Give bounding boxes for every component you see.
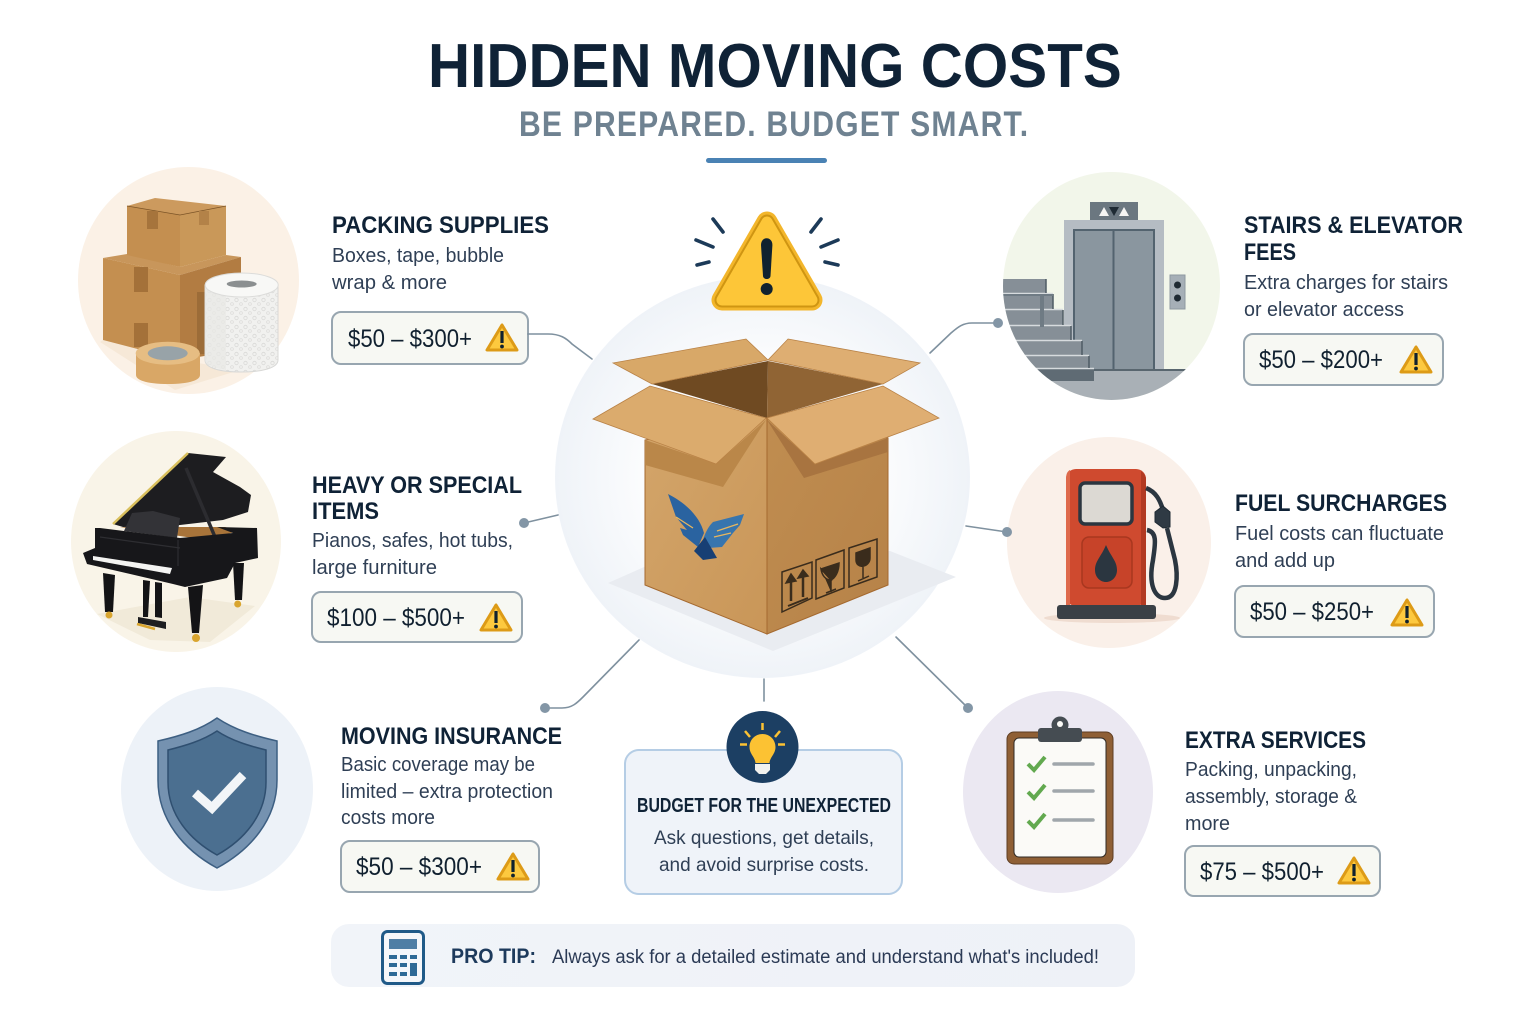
heading: FUEL SURCHARGES xyxy=(1235,490,1447,517)
description xyxy=(331,245,504,294)
subtitle: BE PREPARED. BUDGET SMART. xyxy=(519,104,1028,144)
icon: fuel pump xyxy=(1007,437,1211,648)
icon: boxes and tape xyxy=(78,167,299,394)
heading: EXTRA SERVICES xyxy=(1185,727,1366,754)
price badge: $50 – $200+ xyxy=(1259,346,1383,374)
description: and add up xyxy=(1235,550,1335,572)
icon: clipboard checklist xyxy=(963,691,1153,893)
heading: STAIRS & ELEVATOR xyxy=(1244,212,1463,239)
price badge xyxy=(312,592,522,642)
description: Basic coverage may be xyxy=(341,754,535,776)
icon: calculator xyxy=(382,932,424,984)
panel: moving insurance xyxy=(121,687,562,892)
description: large furniture xyxy=(312,557,437,579)
description: Fuel costs can fluctuate xyxy=(1235,523,1444,545)
heading xyxy=(312,472,522,525)
price badge xyxy=(1244,334,1443,385)
connector lines xyxy=(519,318,1012,713)
panel: stairs and elevator fees xyxy=(1000,170,1463,402)
price badge: $75 – $500+ xyxy=(1200,858,1324,886)
heading: PACKING SUPPLIES xyxy=(332,212,549,239)
box left face xyxy=(645,418,767,634)
central circle with open cardboard box xyxy=(555,276,970,678)
pro tip text: Always ask for a detailed estimate and understand what's included! xyxy=(552,947,1099,968)
price badge: $50 – $300+ xyxy=(348,325,472,353)
icon: shield xyxy=(121,687,313,891)
icon: elevator and stairs xyxy=(1000,170,1224,402)
price badge xyxy=(1185,846,1380,896)
description: Pianos, safes, hot tubs, xyxy=(312,530,513,552)
heading: HEAVY OR SPECIAL xyxy=(312,472,522,499)
description xyxy=(341,754,553,829)
box flap shadows xyxy=(645,420,888,487)
price badge xyxy=(1235,586,1434,637)
panel: heavy or special items xyxy=(71,431,522,652)
description xyxy=(1235,523,1444,572)
box interior xyxy=(652,361,883,418)
title underline xyxy=(706,158,827,163)
description xyxy=(1185,759,1358,835)
panel: extra services xyxy=(963,691,1380,896)
box floor shadow xyxy=(608,551,956,651)
heading: FEES xyxy=(1244,239,1296,266)
description: Boxes, tape, bubble xyxy=(332,245,504,267)
icon: winged logo xyxy=(668,494,744,560)
icon: grand piano xyxy=(71,431,281,652)
panel: pro tip bar xyxy=(331,924,1135,987)
description: and avoid surprise costs. xyxy=(659,854,869,876)
heading: ITEMS xyxy=(312,498,379,525)
callout: budget for the unexpected xyxy=(625,711,902,894)
description: limited – extra protection xyxy=(341,781,553,803)
heading: MOVING INSURANCE xyxy=(341,723,562,750)
description: costs more xyxy=(341,807,435,829)
panel: fuel surcharges xyxy=(1007,437,1447,648)
panel: packing supplies xyxy=(78,167,549,394)
box right face xyxy=(767,418,888,634)
title: HIDDEN MOVING COSTS xyxy=(428,31,1122,100)
price badge: $100 – $500+ xyxy=(327,604,465,632)
price badge: $50 – $250+ xyxy=(1250,598,1374,626)
price badge xyxy=(341,841,539,892)
description xyxy=(654,827,874,876)
price badge xyxy=(332,312,528,364)
icon: handling symbols xyxy=(782,539,877,612)
description: assembly, storage & xyxy=(1185,786,1358,808)
description xyxy=(1244,272,1448,321)
description xyxy=(312,530,513,579)
icon: large warning triangle with rays xyxy=(696,219,838,300)
box flaps xyxy=(593,339,939,464)
icon: light bulb xyxy=(726,711,798,783)
description: more xyxy=(1185,813,1230,835)
description: or elevator access xyxy=(1244,299,1404,321)
description: Extra charges for stairs xyxy=(1244,272,1448,294)
description: wrap & more xyxy=(331,272,447,294)
description: Packing, unpacking, xyxy=(1185,759,1357,781)
pro tip label: PRO TIP: xyxy=(451,945,536,968)
price badge: $50 – $300+ xyxy=(356,853,482,881)
heading xyxy=(1244,212,1463,266)
description: Ask questions, get details, xyxy=(654,827,874,849)
heading: BUDGET FOR THE UNEXPECTED xyxy=(637,795,891,817)
